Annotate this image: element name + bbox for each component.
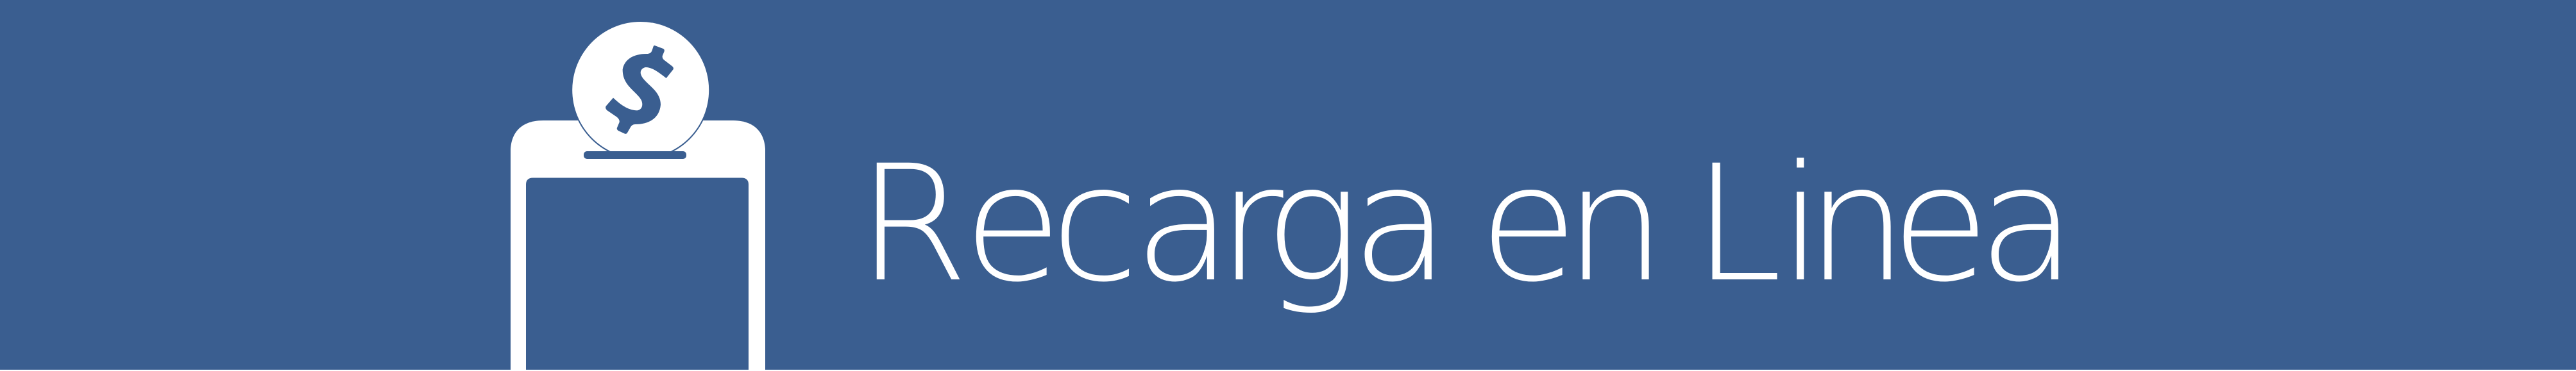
- icon: dollar sign: [606, 45, 674, 134]
- icon: phone with coin: [511, 21, 765, 371]
- icon: phone body: [511, 120, 765, 371]
- icon: coin: [571, 21, 710, 160]
- title: Recarga en Linea: [857, 131, 2076, 317]
- icon: coin slot: [584, 151, 686, 159]
- icon: phone screen: [526, 178, 749, 370]
